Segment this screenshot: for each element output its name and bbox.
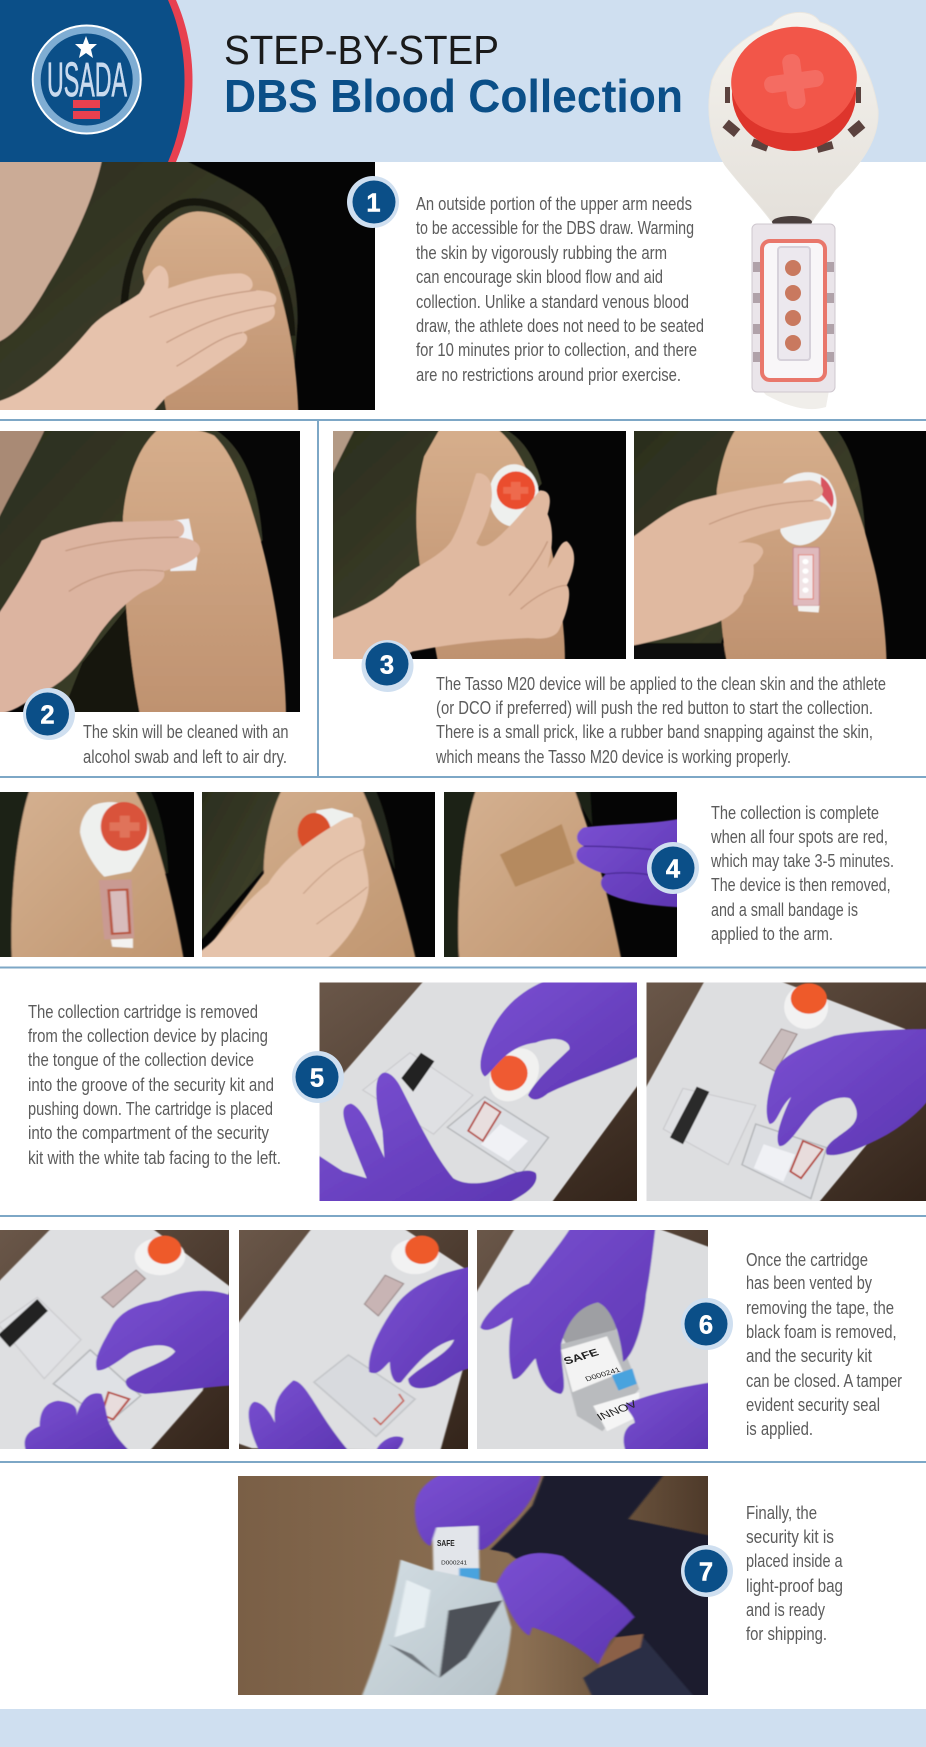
USADA logo xyxy=(32,24,142,134)
text: step 5: The collection cartridge is removed xyxy=(28,1001,258,1022)
text: step 1: the skin by vigorously rubbing the arm xyxy=(416,242,667,263)
text: step 7 xyxy=(746,1502,843,1644)
device windows xyxy=(722,87,865,153)
text: step 4 xyxy=(710,802,894,944)
text: step 5 xyxy=(28,1001,281,1168)
text: step 6 xyxy=(746,1249,902,1439)
kit label text: INNOV xyxy=(594,1398,640,1423)
kit label text: SAFE xyxy=(437,1538,455,1548)
photo: venting the cartridge xyxy=(0,1230,229,1449)
text: step 1 xyxy=(416,193,704,385)
text: step 7: Finally, the xyxy=(746,1502,817,1523)
photo: pushing the red button xyxy=(634,431,926,659)
badge: step 1: 1 xyxy=(366,190,381,218)
text: step 4: and a small bandage is xyxy=(711,899,858,920)
kit label text: D000241 xyxy=(441,1560,467,1566)
header band xyxy=(0,0,926,162)
text: step 1: draw, the athlete does not need to be seated xyxy=(416,315,704,336)
device illustration: Tasso M20 xyxy=(709,12,878,409)
text: step 1: for 10 minutes prior to collection, and there xyxy=(416,339,697,360)
photo: device on arm during collection xyxy=(0,792,194,957)
photo: applying security seal xyxy=(477,1230,708,1449)
text: step 5: kit with the white tab facing to the left. xyxy=(28,1147,281,1168)
badge: step 4: 4 xyxy=(666,856,681,884)
badge: step 4 xyxy=(647,842,699,894)
photo: applying a bandage xyxy=(444,792,677,957)
text: step 1: are no restrictions around prior exercise. xyxy=(416,364,681,385)
title xyxy=(224,27,683,122)
badge: step 7: 7 xyxy=(699,1558,713,1586)
red button xyxy=(724,19,864,151)
photo: hand covering device xyxy=(202,792,435,957)
text: step 6: removing the tape, the xyxy=(746,1297,894,1318)
text: step 7: light-proof bag xyxy=(746,1575,843,1596)
badge: step 6 xyxy=(681,1298,733,1350)
text: step 5: into the compartment of the security xyxy=(28,1122,270,1143)
text: step 6: is applied. xyxy=(746,1418,813,1439)
text: step 1: An outside portion of the upper arm needs xyxy=(416,193,692,214)
header logo panel xyxy=(0,0,192,162)
text: step 5: from the collection device by placing xyxy=(28,1025,268,1046)
text: step 1: can encourage skin blood flow and aid xyxy=(416,266,663,287)
badge: step 5: 5 xyxy=(310,1064,324,1092)
text: step 1: collection. Unlike a standard venous blood xyxy=(416,291,689,312)
text: step 7: security kit is xyxy=(746,1526,834,1547)
text: step 7: and is ready xyxy=(746,1599,826,1620)
kit label text: D000241 xyxy=(584,1366,622,1383)
badge: step 3 xyxy=(362,640,414,692)
collection spots xyxy=(785,260,801,351)
text: step 4: applied to the arm. xyxy=(711,923,833,944)
badge: step 1 xyxy=(347,176,399,228)
text: step 3: which means the Tasso M20 device is working properly. xyxy=(435,746,791,767)
text: step 6: has been vented by xyxy=(746,1272,873,1293)
text: step 6: Once the cartridge xyxy=(746,1249,868,1270)
title: STEP-BY-STEP xyxy=(224,27,499,73)
photo: black foam removal xyxy=(239,1230,468,1449)
kit label text: SAFE xyxy=(561,1346,601,1367)
kit label text xyxy=(561,1346,640,1423)
badge: step 6: 6 xyxy=(699,1312,713,1340)
text: step 4: The collection is complete xyxy=(711,802,879,823)
badge: step 2: 2 xyxy=(40,702,55,730)
photo: placing cartridge into compartment xyxy=(646,982,926,1201)
text: step 2 xyxy=(83,721,288,767)
footer band xyxy=(0,1709,926,1747)
text: step 5: the tongue of the collection device xyxy=(28,1049,254,1070)
kit label text xyxy=(437,1538,467,1566)
badge: step 2 xyxy=(23,688,75,740)
photo: cleaning the skin with a swab xyxy=(0,431,300,712)
text: step 7: for shipping. xyxy=(746,1623,827,1644)
title: DBS Blood Collection xyxy=(224,70,683,122)
badge: step 5 xyxy=(292,1051,344,1103)
text: step 2: The skin will be cleaned with an xyxy=(83,721,288,742)
text: step 5: pushing down. The cartridge is placed xyxy=(28,1098,273,1119)
text: step 7: placed inside a xyxy=(746,1550,843,1571)
text: step 6: and the security kit xyxy=(746,1345,872,1366)
photo: security kit into light-proof bag xyxy=(238,1476,708,1695)
text: step 1: to be accessible for the DBS draw. Warming xyxy=(416,217,694,238)
text: step 2: alcohol swab and left to air dry. xyxy=(83,746,287,767)
cartridge xyxy=(752,224,835,409)
badge: step 3: 3 xyxy=(380,652,394,680)
photo: placing device into security kit xyxy=(320,982,637,1201)
badge: step 7 xyxy=(681,1545,733,1597)
photo: rubbing the upper arm xyxy=(0,162,375,410)
text: step 3 xyxy=(435,673,886,767)
text: step 6: evident security seal xyxy=(746,1394,880,1415)
USADA logo: USADA xyxy=(47,54,127,107)
text: step 5: into the groove of the security kit and xyxy=(28,1074,274,1095)
photo: holding device to arm xyxy=(333,431,626,659)
